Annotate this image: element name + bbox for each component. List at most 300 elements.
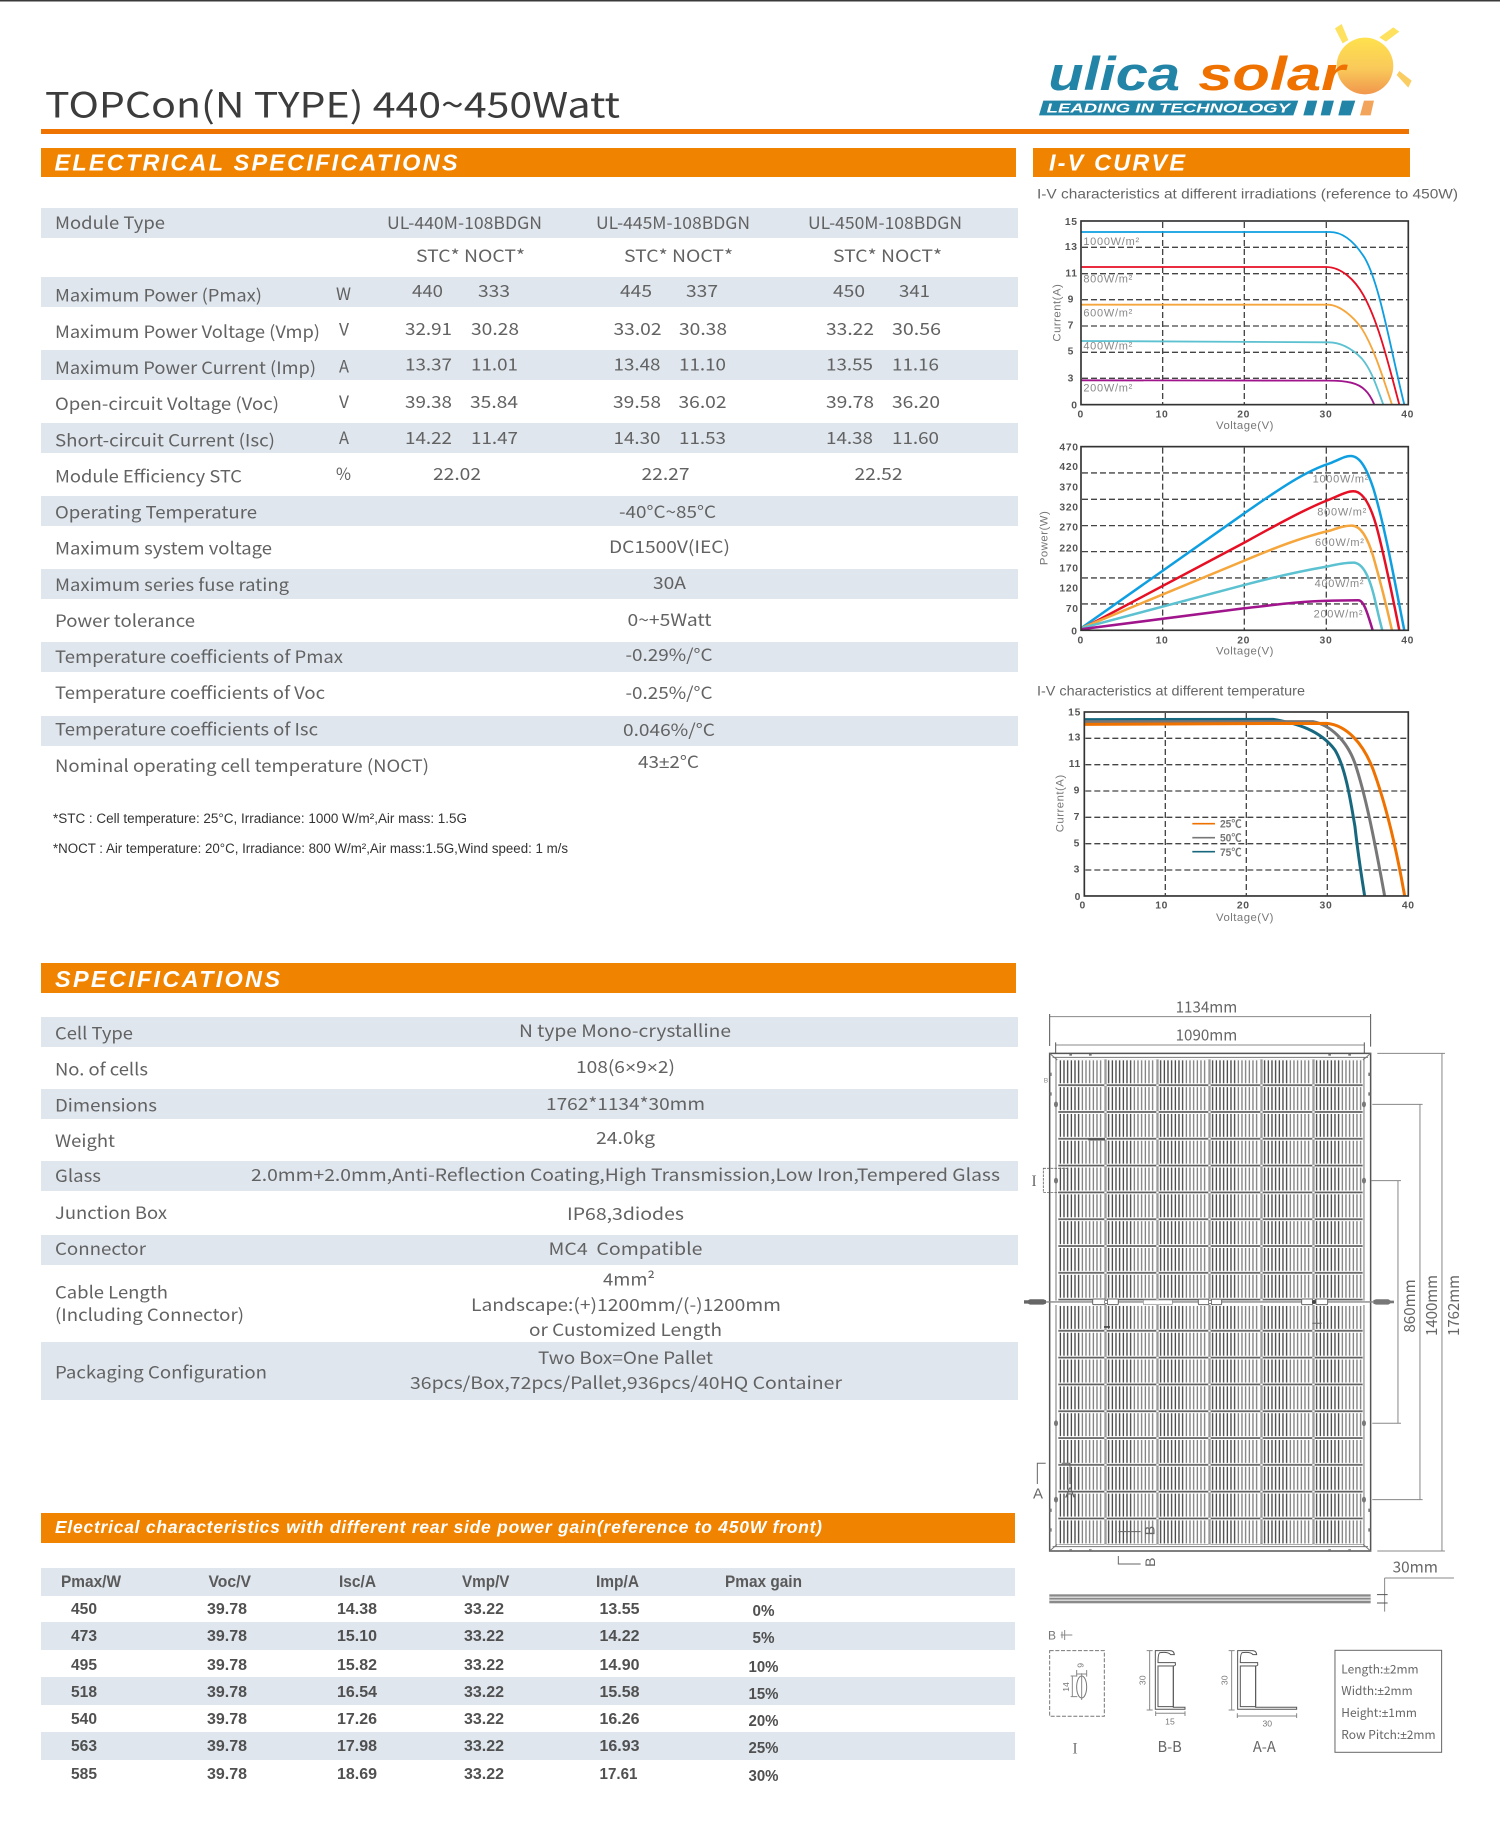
logo tagline xyxy=(1039,101,1374,116)
chart: current vs voltage at irradiances: Current(A) xyxy=(1051,284,1063,342)
row: 25% gain: 33.22 xyxy=(464,1738,504,1755)
row: maximum power current: 11.16 xyxy=(892,350,939,376)
heading: specifications xyxy=(41,963,1016,993)
chart: current vs voltage at irradiances: 40 xyxy=(1401,410,1414,421)
row: 0% gain: 39.78 xyxy=(207,1601,247,1618)
chart: current vs voltage at temperatures: 30 xyxy=(1320,900,1332,911)
chart: current vs voltage at irradiances: 20 xyxy=(1237,410,1250,421)
chart: current vs voltage at irradiances: 200W/m² xyxy=(1083,383,1133,395)
row: maximum series fuse rating: Maximum series fuse rating xyxy=(55,571,289,596)
chart: power vs voltage at irradiances: 470 xyxy=(1059,442,1079,453)
row: maximum power current: 13.48 xyxy=(614,350,660,376)
chart: power vs voltage at irradiances: 400W/m² xyxy=(1315,578,1364,590)
row: 25% gain: 25% xyxy=(748,1740,778,1757)
row: maximum power voltage: 30.38 xyxy=(679,315,727,340)
section marker A: A xyxy=(1033,1485,1043,1502)
row: module efficiency: Module Efficiency STC xyxy=(55,462,242,488)
chart: power vs voltage at irradiances: 270 xyxy=(1059,523,1079,534)
logo wordmark: ulica xyxy=(1048,48,1180,101)
chart: power vs voltage at irradiances: 320 xyxy=(1059,503,1079,514)
table header: Pmax gain xyxy=(725,1573,802,1591)
row: maximum power voltage: V xyxy=(339,316,349,340)
row: module type xyxy=(41,208,1018,238)
chart: current vs voltage at irradiances: 13 xyxy=(1065,242,1078,253)
row: 20% gain: 16.26 xyxy=(600,1711,640,1728)
row: 5% gain: 39.78 xyxy=(207,1628,247,1645)
row: operating temperature: Operating Temperature xyxy=(55,498,257,524)
row: power tolerance: Power tolerance xyxy=(55,607,195,632)
row: short-circuit current: 11.60 xyxy=(892,424,939,449)
chart: current vs voltage at irradiances: 0 xyxy=(1071,400,1078,411)
heading: electrical specifications xyxy=(41,148,1016,177)
chart: power vs voltage at irradiances: 200W/m² xyxy=(1314,609,1363,621)
chart: current vs voltage at irradiances: Voltage(V) xyxy=(1216,420,1274,432)
row: weight: Weight xyxy=(55,1127,116,1152)
row: maximum power: 440 xyxy=(412,277,443,302)
section B-B: 30 xyxy=(1138,1675,1148,1685)
chart: current vs voltage at irradiances: 7 xyxy=(1068,321,1074,332)
row: maximum power current: 11.01 xyxy=(471,350,518,376)
row: packaging configuration: Packaging Configuration xyxy=(55,1358,267,1384)
row: dimensions xyxy=(41,1089,1018,1119)
footnotes: *NOCT : Air temperature: 20°C, Irradiance: 800 W/m²,Air mass:1.5G,Wind speed: 1 m/s xyxy=(53,841,568,856)
row: packaging configuration xyxy=(41,1342,1018,1400)
row: maximum power: W xyxy=(336,280,351,305)
row: cell type: Cell Type xyxy=(55,1020,133,1044)
row: temperature coefficient of Voc xyxy=(55,679,713,704)
chart: current vs voltage at temperatures: 9 xyxy=(1074,786,1080,797)
row: maximum series fuse rating xyxy=(41,569,1018,599)
heading: I-V curve xyxy=(1033,148,1410,177)
table header: Isc/A xyxy=(339,1573,376,1591)
row: cable length: Cable Length xyxy=(55,1278,168,1304)
row: glass xyxy=(41,1161,1018,1191)
row: 5% gain: 33.22 xyxy=(464,1628,504,1645)
row: nominal operating cell temperature: Nominal operating cell temperature (NOCT) xyxy=(55,752,429,777)
footnotes xyxy=(53,811,568,856)
chart: current vs voltage at irradiances: 400W/m² xyxy=(1083,341,1133,353)
side view bar xyxy=(1049,1594,1371,1603)
chart: current vs voltage at temperatures: 11 xyxy=(1069,759,1081,770)
section marker B: B xyxy=(1142,1558,1158,1567)
row: cell type xyxy=(41,1017,1018,1047)
module cell grid xyxy=(1050,1053,1371,1551)
B section marker xyxy=(1048,1628,1072,1642)
row: open-circuit voltage: Open-circuit Voltage (Voc) xyxy=(55,390,279,415)
row: power tolerance xyxy=(55,606,712,632)
orange rule xyxy=(41,129,1409,134)
tolerance legend box: Width:±2mm xyxy=(1341,1682,1413,1699)
row: connector xyxy=(41,1235,1018,1265)
panel: side view and cross sections xyxy=(1048,1556,1454,1757)
row: cell type: N type Mono-crystalline xyxy=(519,1017,731,1042)
legend: 75℃ xyxy=(1220,847,1242,859)
chart: current vs voltage at temperatures: 40 xyxy=(1402,900,1415,911)
section B-B: B-B xyxy=(1157,1736,1182,1757)
row: maximum system voltage: Maximum system voltage xyxy=(55,534,272,560)
chart: current vs voltage at irradiances: 10 xyxy=(1156,410,1168,421)
row: number of cells: 108(6 ×9×2) xyxy=(576,1053,675,1078)
chart: power vs voltage at irradiances: 170 xyxy=(1059,563,1079,574)
row: 15% gain: 15% xyxy=(748,1686,778,1703)
row: 5% gain: 5% xyxy=(752,1630,774,1647)
chart: current vs voltage at temperatures: 10 xyxy=(1155,900,1168,911)
row: 10% gain: 39.78 xyxy=(207,1657,247,1674)
row: 20% gain xyxy=(71,1711,778,1730)
row: 30% gain: 39.78 xyxy=(207,1766,247,1783)
top border line xyxy=(0,0,1500,2)
row: 15% gain xyxy=(41,1677,1015,1705)
text: irradiance subtitle: I-V characteristics at different irradiations (reference to 450W) xyxy=(1037,186,1458,202)
row: weight: 24.0kg xyxy=(596,1124,655,1149)
chart: current vs voltage at irradiances: 600W/m² xyxy=(1083,307,1133,319)
title: TOPCon(N TYPE) 440~450Watt xyxy=(45,78,620,128)
dimension: 1090mm xyxy=(1056,1023,1364,1053)
row: 20% gain: 20% xyxy=(748,1713,778,1730)
chart: current vs voltage at temperatures: 7 xyxy=(1074,812,1080,823)
chart: power vs voltage at irradiances: 120 xyxy=(1059,584,1079,595)
logo wordmark xyxy=(1048,48,1348,101)
row: module efficiency: % xyxy=(336,460,351,485)
section A-A: 30 xyxy=(1262,1718,1272,1728)
row: cable length: (Including Connector) xyxy=(55,1301,244,1326)
row: temperature coefficient of Isc: Temperature coefficients of Isc xyxy=(55,716,318,740)
section A-A: A-A xyxy=(1253,1736,1276,1757)
row: maximum power: 445 xyxy=(620,277,652,302)
legend xyxy=(1192,819,1242,859)
chart: current vs voltage at temperatures xyxy=(1054,707,1415,924)
dimension: 1400mm: 1400mm xyxy=(1420,1275,1442,1336)
chart: current vs voltage at irradiances xyxy=(1051,217,1414,432)
row: 15% gain: 33.22 xyxy=(464,1684,504,1701)
row: 15% gain: 518 xyxy=(71,1684,97,1701)
legend: 50℃ xyxy=(1220,833,1242,845)
dimension: 30mm xyxy=(1377,1556,1454,1612)
chart: power vs voltage at irradiances: 420 xyxy=(1059,462,1079,473)
heading: rear side power gain: Electrical characteristics with different rear side power gain(reference to 450W front) xyxy=(55,1517,822,1537)
chart: current vs voltage at irradiances: 0 xyxy=(1077,410,1084,421)
row: 10% gain: 495 xyxy=(71,1657,97,1674)
row: maximum power current: A xyxy=(339,352,350,378)
chart: current vs voltage at temperatures: 5 xyxy=(1074,838,1080,849)
row: junction box xyxy=(55,1199,684,1225)
table header xyxy=(41,1568,1015,1596)
detail I: 14 xyxy=(1061,1682,1071,1692)
row: 30% gain: 30% xyxy=(748,1768,778,1785)
row: open-circuit voltage: 39.38 xyxy=(405,388,452,413)
row: maximum power voltage: 32.91 xyxy=(405,315,452,340)
tolerance legend box: Height:±1mm xyxy=(1341,1704,1417,1721)
row: 0% gain: 0% xyxy=(752,1603,774,1620)
dimension: 1134mm: 1134mm xyxy=(1176,995,1237,1017)
row: cable length: or Customized Length xyxy=(529,1316,722,1341)
chart: current vs voltage at temperatures: 3 xyxy=(1074,864,1080,875)
row: open-circuit voltage: 39.78 xyxy=(826,388,874,413)
row: module type: UL-450M-108BDGN xyxy=(808,209,962,234)
section marker I xyxy=(1031,1077,1067,1193)
row: module type: Module Type xyxy=(55,209,165,234)
row: 25% gain: 17.98 xyxy=(337,1738,377,1755)
chart: current vs voltage at temperatures: 20 xyxy=(1237,900,1250,911)
row: number of cells: No. of cells xyxy=(55,1056,148,1080)
row: 20% gain: 17.26 xyxy=(337,1711,377,1728)
chart: current vs voltage at irradiances: 11 xyxy=(1065,269,1078,280)
row: maximum power: 333 xyxy=(478,277,510,302)
row: maximum power current: 11.10 xyxy=(679,350,726,376)
section marker I: I xyxy=(1031,1173,1037,1190)
row: 10% gain: 14.90 xyxy=(600,1657,640,1674)
row: temperature coefficient of Pmax xyxy=(41,641,1018,672)
chart: power vs voltage at irradiances: 0 xyxy=(1077,635,1084,646)
chart: power vs voltage at irradiances: 70 xyxy=(1066,604,1079,615)
chart: power vs voltage at irradiances: 30 xyxy=(1320,635,1332,646)
row: module efficiency: 22.02 xyxy=(433,460,481,485)
row: 25% gain: 563 xyxy=(71,1738,97,1755)
row: cable length: 4mm² xyxy=(603,1266,655,1290)
row: module type: UL-445M-108BDGN xyxy=(596,209,750,234)
chart: current vs voltage at irradiances: 15 xyxy=(1065,217,1078,228)
row: 30% gain: 585 xyxy=(71,1766,97,1783)
dimension: 860mm: 860mm xyxy=(1398,1279,1420,1333)
chart: power vs voltage at irradiances: Power(W) xyxy=(1038,511,1050,565)
chart: power vs voltage at irradiances: Voltage(V) xyxy=(1216,646,1274,658)
row: maximum power voltage: 33.02 xyxy=(614,315,662,340)
row: 15% gain: 39.78 xyxy=(207,1684,247,1701)
row: power tolerance: 0~+5Watt xyxy=(628,606,712,631)
chart: current vs voltage at irradiances: 800W/m² xyxy=(1083,274,1133,286)
row: maximum power current: Maximum Power Current (Imp) xyxy=(55,354,316,379)
logo wordmark: solar xyxy=(1198,48,1348,101)
chart: current vs voltage at irradiances: 9 xyxy=(1068,295,1074,306)
row: module efficiency xyxy=(55,460,902,488)
row: 30% gain: 17.61 xyxy=(600,1766,638,1783)
row: 10% gain xyxy=(71,1657,778,1676)
row: 10% gain: 10% xyxy=(748,1659,778,1676)
row: open-circuit voltage: 36.02 xyxy=(678,388,726,413)
section B-B: 15 xyxy=(1165,1717,1175,1727)
row: short-circuit current: Short-circuit Current (Isc) xyxy=(55,426,275,452)
row: 0% gain: 14.38 xyxy=(337,1601,377,1618)
row: 5% gain: 15.10 xyxy=(337,1628,377,1645)
row: open-circuit voltage: 35.84 xyxy=(470,388,518,413)
row: STC and NOCT headings: STC* NOCT* xyxy=(624,242,733,267)
heading: specifications: SPECIFICATIONS xyxy=(55,966,280,992)
row: maximum power xyxy=(41,277,1018,307)
row: temperature coefficient of Pmax: Temperature coefficients of Pmax xyxy=(55,643,344,668)
row: cable length xyxy=(55,1266,781,1341)
chart: power vs voltage at irradiances: 1000W/m² xyxy=(1313,473,1369,485)
chart: current vs voltage at temperatures: 13 xyxy=(1068,732,1081,743)
panel: electrical specifications table xyxy=(41,208,1018,777)
row: module efficiency: 22.52 xyxy=(854,460,902,485)
row: open-circuit voltage: 36.20 xyxy=(892,388,940,413)
chart: current vs voltage at temperatures: 15 xyxy=(1068,707,1081,718)
section marker A: A xyxy=(1065,1484,1075,1501)
row: maximum power voltage: Maximum Power Voltage (Vmp) xyxy=(55,318,320,343)
row: connector: MC4 Compatible xyxy=(548,1235,702,1260)
panel: specifications table xyxy=(41,1017,1018,1400)
row: nominal operating cell temperature: 43±2°C xyxy=(638,748,699,773)
row: short-circuit current: 14.30 xyxy=(614,424,660,449)
chart: power vs voltage at irradiances: 800W/m² xyxy=(1317,507,1367,519)
row: STC and NOCT headings xyxy=(416,242,942,267)
row: operating temperature xyxy=(41,496,1018,526)
row: 25% gain: 39.78 xyxy=(207,1738,247,1755)
row: 30% gain xyxy=(71,1766,778,1785)
row: 20% gain: 540 xyxy=(71,1711,97,1728)
row: maximum power: 341 xyxy=(899,277,930,302)
chart: power vs voltage at irradiances: 40 xyxy=(1401,635,1414,646)
row: 0% gain xyxy=(71,1601,774,1620)
row: maximum power voltage: 30.56 xyxy=(892,315,941,340)
row: junction box: Junction Box xyxy=(55,1199,168,1224)
dimension: 860mm xyxy=(1371,1181,1420,1423)
panel: module front drawing with dimensions xyxy=(1024,995,1464,1567)
row: dimensions: 1762*1134*30mm xyxy=(546,1090,705,1115)
chart: current vs voltage at temperatures: Voltage(V) xyxy=(1216,912,1274,924)
row: short-circuit current: 14.38 xyxy=(826,424,873,449)
row: STC and NOCT headings: STC* NOCT* xyxy=(416,242,525,267)
row: open-circuit voltage: V xyxy=(339,388,349,413)
legend: 25℃ xyxy=(1220,819,1242,831)
row: short-circuit current: 11.47 xyxy=(471,424,518,449)
dimension: 1762mm xyxy=(1377,1053,1464,1551)
row: STC and NOCT headings: STC* NOCT* xyxy=(833,242,942,267)
logo sun xyxy=(1335,24,1412,94)
row: 20% gain: 33.22 xyxy=(464,1711,504,1728)
row: 25% gain: 16.93 xyxy=(600,1738,640,1755)
chart: current vs voltage at irradiances: 1000W/m² xyxy=(1083,236,1140,248)
row: temperature coefficient of Pmax: -0.29%/°C xyxy=(626,641,713,666)
detail I: 9 xyxy=(1075,1663,1085,1668)
row: short-circuit current: A xyxy=(339,424,350,449)
heading: electrical specifications: ELECTRICAL SPECIFICATIONS xyxy=(54,150,458,176)
row: 15% gain: 15.58 xyxy=(600,1684,640,1701)
table header: Voc/V xyxy=(208,1573,251,1591)
row: 0% gain: 33.22 xyxy=(464,1601,504,1618)
chart: power vs voltage at irradiances: 370 xyxy=(1059,482,1079,493)
logo tagline: LEADING IN TECHNOLOGY xyxy=(1047,102,1292,116)
detail I xyxy=(1050,1651,1104,1757)
dimension: 1400mm xyxy=(1372,1104,1442,1500)
row: 5% gain xyxy=(41,1622,1015,1650)
row: maximum power current: 13.37 xyxy=(405,350,452,376)
row: short-circuit current xyxy=(41,423,1018,453)
row: weight xyxy=(55,1124,655,1152)
mounting holes xyxy=(1050,1054,1370,1551)
table header: Imp/A xyxy=(596,1573,639,1591)
row: maximum series fuse rating: 30A xyxy=(653,569,687,594)
row: temperature coefficient of Voc: -0.25%/°C xyxy=(626,679,713,704)
section A-A xyxy=(1220,1651,1297,1757)
chart: current vs voltage at irradiances: 5 xyxy=(1068,347,1074,358)
B section marker: B xyxy=(1048,1628,1056,1642)
row: connector: Connector xyxy=(55,1235,146,1260)
chart: current vs voltage at irradiances: 30 xyxy=(1320,410,1332,421)
row: maximum power: Maximum Power (Pmax) xyxy=(55,282,262,306)
row: short-circuit current: 14.22 xyxy=(405,424,452,449)
table header: Pmax/W xyxy=(61,1573,121,1591)
row: maximum system voltage xyxy=(55,533,730,560)
section B-B xyxy=(1138,1651,1185,1757)
row: dimensions: Dimensions xyxy=(55,1092,157,1116)
dimension: 1090mm: 1090mm xyxy=(1176,1023,1237,1045)
row: 5% gain: 473 xyxy=(71,1628,97,1645)
detail I: I xyxy=(1072,1740,1078,1757)
tolerance legend box: Row Pitch:±2mm xyxy=(1341,1726,1436,1743)
chart: current vs voltage at temperatures: Current(A) xyxy=(1054,774,1066,832)
row: 30% gain: 33.22 xyxy=(464,1766,504,1783)
chart: power vs voltage at irradiances: 20 xyxy=(1237,635,1250,646)
row: nominal operating cell temperature xyxy=(55,748,699,777)
row: 20% gain: 39.78 xyxy=(207,1711,247,1728)
row: maximum power current xyxy=(41,350,1018,380)
row: number of cells xyxy=(55,1053,675,1080)
panel: rear side power gain table xyxy=(41,1568,1015,1785)
section marker B: B xyxy=(1141,1526,1157,1535)
row: temperature coefficient of Isc xyxy=(41,716,1018,746)
section marker A xyxy=(1033,1463,1075,1502)
row: maximum power voltage xyxy=(55,315,941,343)
row: junction box: IP68,3diodes xyxy=(567,1200,684,1225)
text: temperature subtitle: I-V characteristics at different temperature xyxy=(1037,682,1305,698)
chart: power vs voltage at irradiances: 600W/m² xyxy=(1315,537,1365,549)
row: short-circuit current: 11.53 xyxy=(679,424,726,449)
row: 0% gain: 13.55 xyxy=(600,1601,640,1618)
section marker I: B xyxy=(1044,1077,1049,1084)
row: maximum power voltage: 30.28 xyxy=(471,315,519,340)
chart: power vs voltage at irradiances: 10 xyxy=(1156,635,1168,646)
row: 15% gain: 16.54 xyxy=(337,1684,377,1701)
row: maximum power voltage: 33.22 xyxy=(826,315,874,340)
row: open-circuit voltage xyxy=(55,388,940,415)
row: maximum power: 337 xyxy=(686,277,718,302)
row: maximum power: 450 xyxy=(833,277,865,302)
row: 5% gain: 14.22 xyxy=(600,1628,640,1645)
junction boxes and cable xyxy=(1024,1299,1394,1305)
row: module efficiency: 22.27 xyxy=(642,460,690,485)
dimension: 30mm: 30mm xyxy=(1393,1556,1438,1578)
section A-A: 30 xyxy=(1220,1675,1230,1685)
footnotes: *STC : Cell temperature: 25°C, Irradiance: 1000 W/m²,Air mass: 1.5G xyxy=(53,811,467,826)
section marker B xyxy=(1118,1526,1158,1567)
row: temperature coefficient of Voc: Temperature coefficients of Voc xyxy=(55,679,325,704)
logo: ulica solar xyxy=(1039,24,1412,116)
row: 30% gain: 18.69 xyxy=(337,1766,377,1783)
chart: power vs voltage at irradiances: 0 xyxy=(1071,626,1078,637)
table header: Vmp/V xyxy=(462,1573,510,1591)
row: module type: UL-440M-108BDGN xyxy=(387,209,542,234)
row: cable length: Landscape:(+)1200mm/(-)1200mm xyxy=(471,1291,781,1316)
chart: power vs voltage at irradiances xyxy=(1038,442,1414,658)
chart: current vs voltage at irradiances: 3 xyxy=(1068,373,1074,384)
row: 0% gain: 450 xyxy=(71,1601,97,1618)
row: glass: 2.0mm+2.0mm,Anti-Reflection Coating,High Transmission,Low Iron,Tempered Glass xyxy=(251,1161,1000,1186)
row: open-circuit voltage: 39.58 xyxy=(613,388,661,413)
row: 10% gain: 15.82 xyxy=(337,1657,377,1674)
row: packaging configuration: Two Box=One Pallet xyxy=(538,1344,714,1369)
chart: current vs voltage at temperatures: 0 xyxy=(1075,892,1081,903)
row: temperature coefficient of Isc: 0.046%/°C xyxy=(623,716,715,741)
dimension: 1762mm: 1762mm xyxy=(1442,1275,1464,1336)
tolerance legend box: Length:±2mm xyxy=(1341,1660,1419,1677)
chart: current vs voltage at temperatures: 0 xyxy=(1079,900,1086,911)
heading: I-V curve: I-V CURVE xyxy=(1049,150,1186,176)
row: 25% gain xyxy=(41,1732,1015,1760)
row: operating temperature: -40°C~85°C xyxy=(619,498,716,523)
row: 10% gain: 33.22 xyxy=(464,1657,504,1674)
chart: power vs voltage at irradiances: 220 xyxy=(1059,543,1079,554)
